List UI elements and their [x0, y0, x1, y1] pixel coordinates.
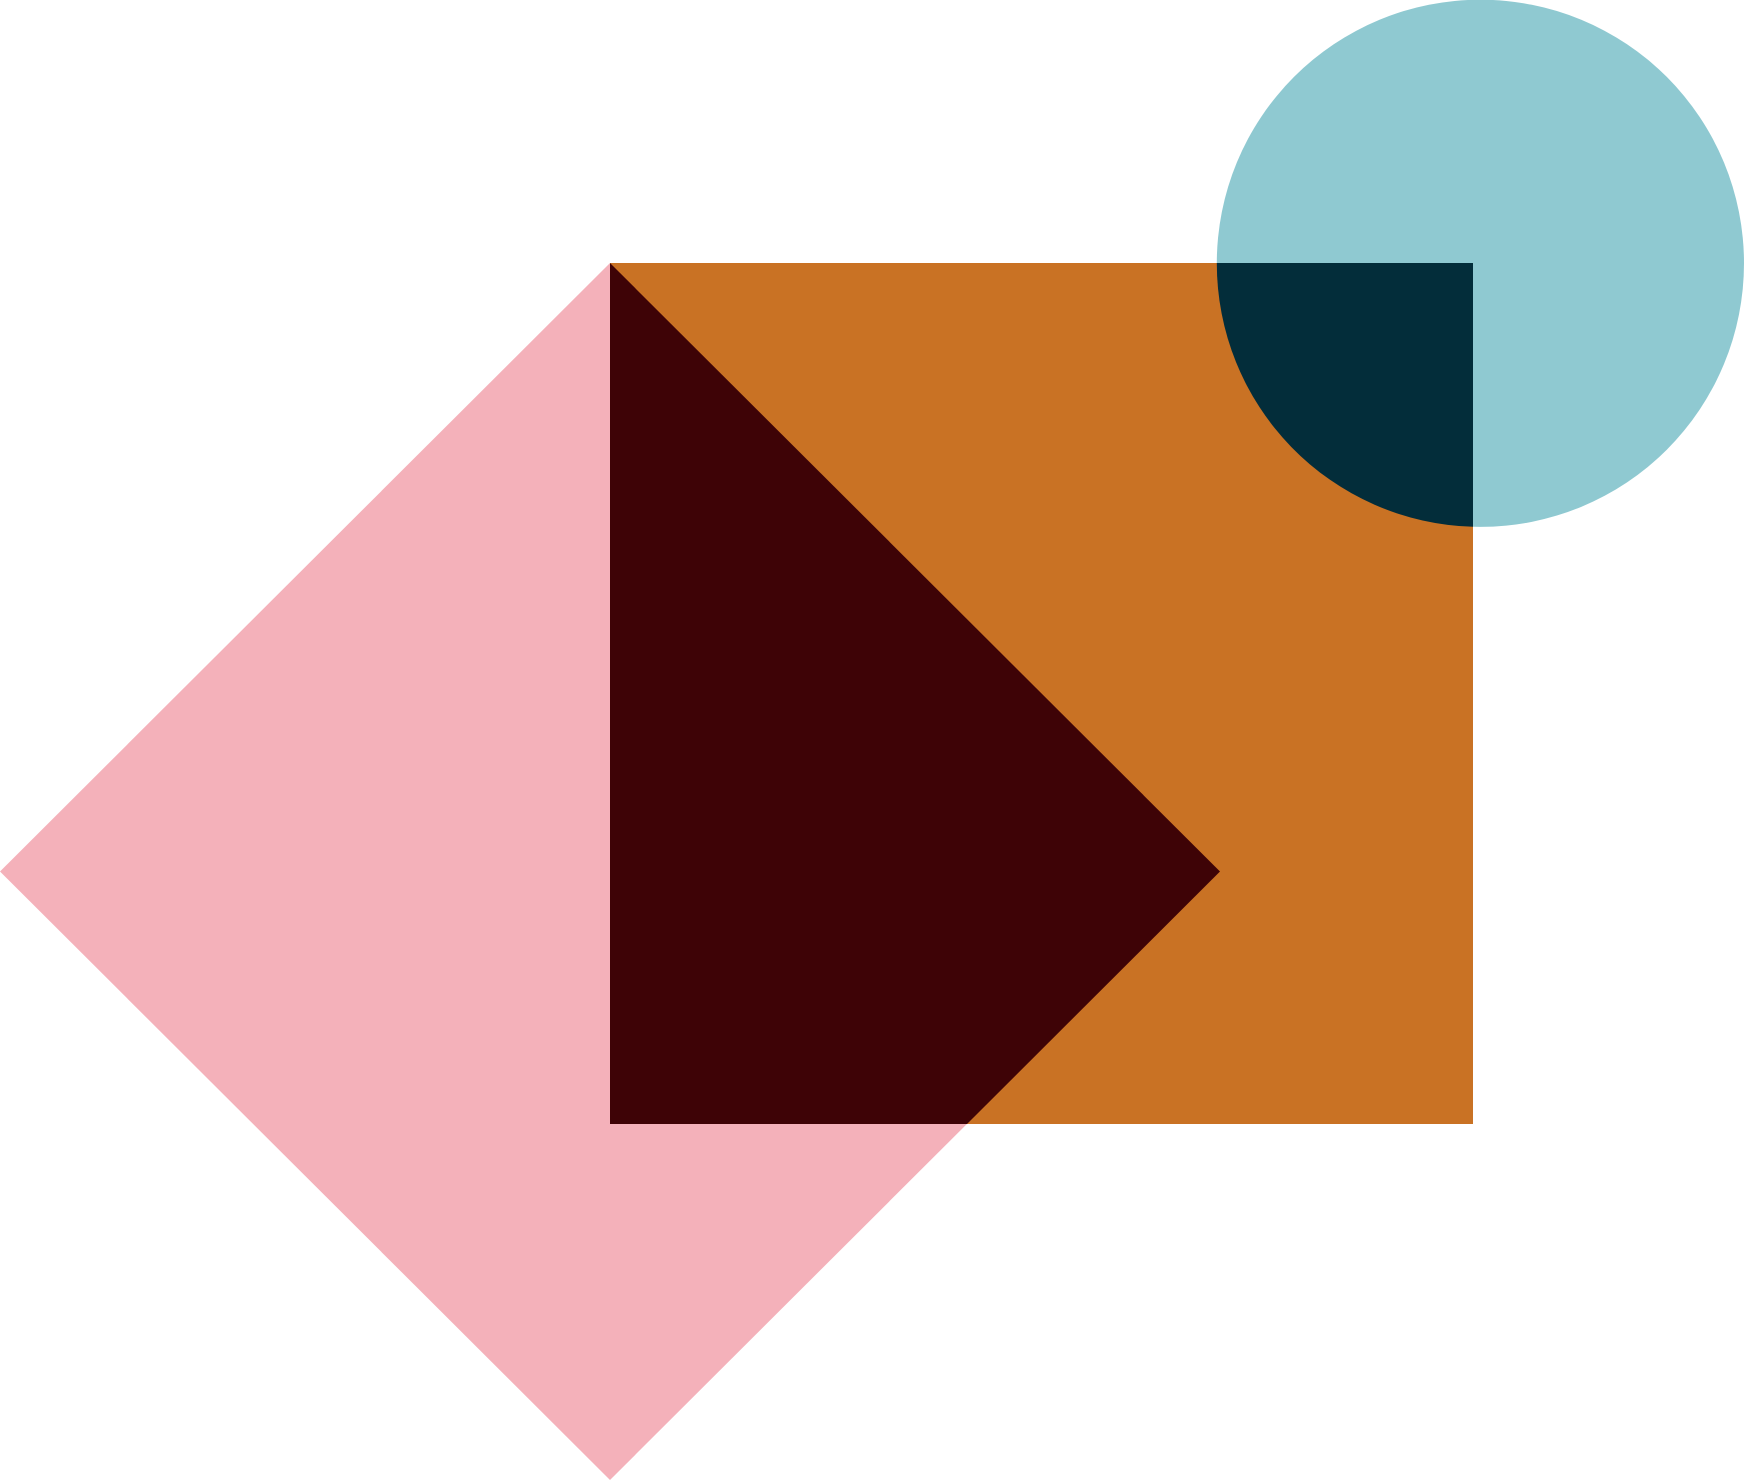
dark red overlap of diamond and square [610, 263, 1220, 1124]
dark teal overlap of circle and square [1217, 263, 1473, 527]
pink diamond [0, 263, 1220, 1480]
teal circle [1217, 0, 1744, 527]
orange square [610, 263, 1473, 1124]
